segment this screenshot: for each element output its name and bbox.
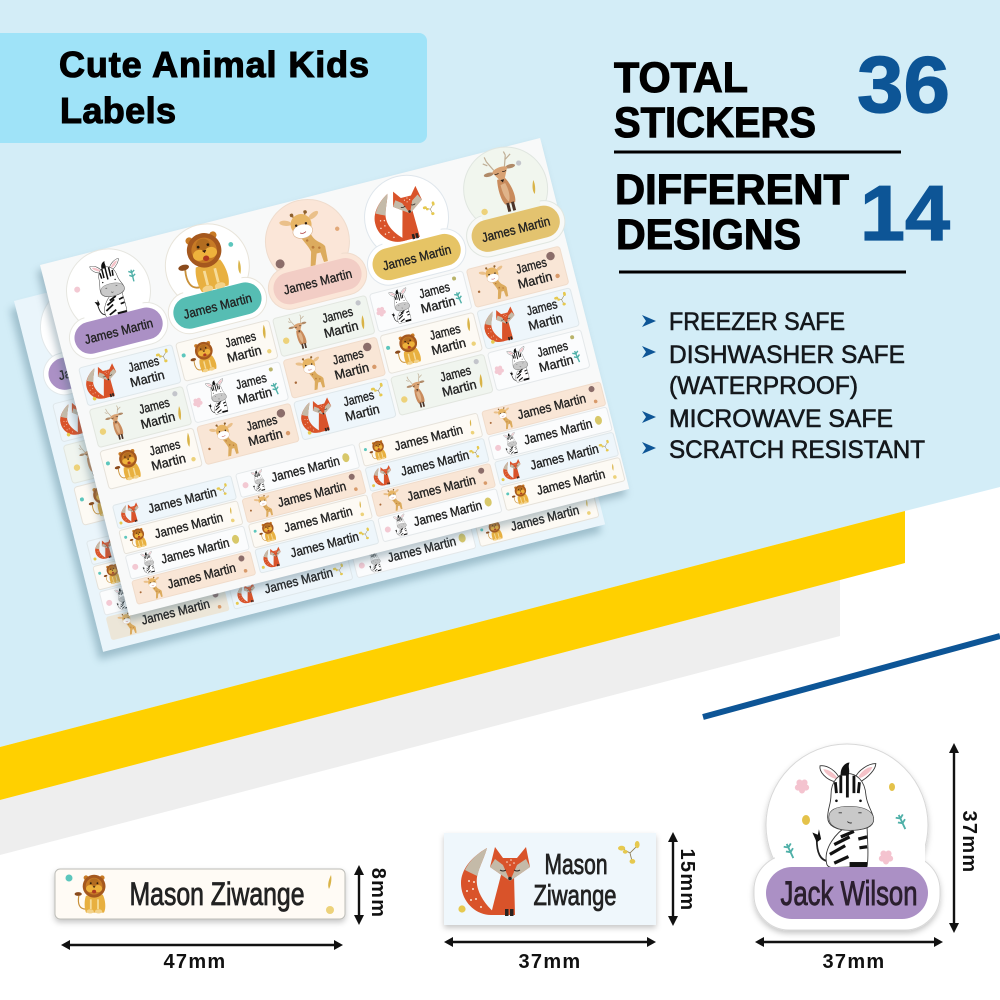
sample label: lion 47x8mm: Mason Ziwange [130, 876, 304, 912]
medium label row 1: lion: Martin [225, 342, 263, 366]
medium label row 3: fox: James [342, 387, 376, 410]
medium label row 1: fox: Martin [128, 367, 166, 390]
front label sheet [37, 136, 633, 622]
back label: lion: Martin [124, 486, 161, 510]
back small label: lion row four: James Martin [509, 503, 581, 534]
medium label row 2: lion: Martin [430, 335, 467, 358]
total stickers stat: TOTAL [614, 54, 748, 102]
small label column D: giraffe: James Martin [516, 391, 588, 422]
medium label row 1: deer: James [320, 304, 355, 326]
feature 4: SCRATCH RESISTANT [669, 436, 925, 464]
medium label row 2: giraffe: Martin [333, 359, 371, 383]
medium label row 3: giraffe: Martin [246, 426, 284, 449]
small label column B: giraffe [242, 469, 366, 523]
medium label row 2: fox: Martin [527, 310, 564, 333]
dimension: 37mm fox: 37mm [518, 951, 582, 973]
small label column B: lion [248, 495, 372, 548]
sample sticker: zebra 37x37mm: Jack Wilson [780, 875, 918, 913]
medium label row 3: fox [294, 379, 396, 440]
medium label row 2: zebra [186, 362, 289, 423]
sticker: fox yellow: James Martin [381, 242, 453, 274]
small label column C: fox [365, 438, 489, 492]
back small label: zebra: James Martin [133, 571, 205, 603]
small label column D: lion [501, 457, 625, 511]
medium label row 2: lion: James [428, 321, 462, 343]
different designs stat: DESIGNS [616, 211, 801, 259]
back label: lion [74, 464, 176, 525]
medium label row 1: fox: James [127, 353, 161, 375]
back small label: giraffe: James Martin [140, 596, 211, 628]
back label: deer [63, 422, 166, 484]
small label column B: lion: James Martin [282, 504, 354, 535]
arrow bullet 4 [642, 442, 656, 454]
medium label row 2: lion [380, 312, 483, 374]
back small label: lion [93, 537, 217, 590]
light blue diagonal background [0, 0, 1000, 747]
medium label row 2: giraffe: James [331, 345, 365, 368]
small label column C: giraffe: James Martin [406, 473, 477, 504]
back label: deer: James [111, 431, 145, 453]
sticker: lion teal: James Martin [182, 291, 254, 322]
grey diagonal band [0, 580, 840, 855]
medium label row 2: zebra: Martin [236, 384, 274, 407]
medium label row 3: lion: Martin [150, 450, 187, 474]
yellow diagonal band [0, 511, 905, 800]
total stickers stat [614, 40, 950, 147]
small label column C: lion [359, 413, 483, 466]
medium label row 3: zebra: James [535, 338, 570, 360]
small label column D: zebra [488, 407, 612, 460]
medium label row 2: deer: James [137, 395, 171, 417]
small label column A: zebra: James Martin [159, 535, 231, 567]
total stickers stat: STICKERS [614, 99, 816, 147]
small label column B: giraffe: James Martin [276, 479, 348, 510]
back label: fox: Martin [102, 403, 140, 426]
back small label: zebra [99, 562, 223, 615]
small label column B: zebra [236, 444, 360, 498]
medium label row 1: lion: James [223, 328, 258, 351]
sticker: zebra purple: James Martin [83, 316, 155, 347]
feature 3: MICROWAVE SAFE [669, 405, 893, 433]
small label column A: fox: James Martin [147, 485, 218, 516]
back label: fox [53, 381, 155, 442]
medium label row 1: giraffe [466, 246, 569, 308]
divider two [619, 270, 906, 274]
small label column C: zebra [378, 489, 502, 542]
medium label row 2: deer [89, 386, 192, 448]
back sticker: zebra: James Martin [57, 352, 129, 383]
dimension: 37mm sticker width: 37mm [822, 951, 886, 973]
feature list [642, 308, 925, 464]
sample label: lion 47x8mm [55, 869, 345, 919]
medium label row 1: giraffe: James [514, 254, 548, 277]
dimension: 8mm: 8mm [367, 868, 389, 918]
medium label row 2: deer: Martin [139, 409, 177, 432]
medium label row 3: lion [100, 428, 202, 489]
medium label row 3: deer [391, 354, 493, 415]
blue diagonal stripe [703, 636, 1000, 717]
small label column A: giraffe: James Martin [166, 560, 237, 592]
medium label row 3: deer: James [438, 362, 473, 385]
feature 2: DISHWASHER SAFE [669, 341, 905, 369]
medium label row 3: zebra: Martin [537, 352, 575, 375]
total stickers stat: 36 [857, 40, 950, 129]
sticker: zebra purple [50, 238, 172, 363]
dimension: 37mm fox [444, 937, 656, 973]
different designs stat: 14 [860, 169, 950, 257]
title banner: Labels [60, 90, 176, 131]
small label column B: fox [255, 520, 379, 573]
medium label row 1: zebra [369, 271, 472, 332]
medium label row 3: giraffe: James [245, 412, 279, 434]
medium label row 3: deer: Martin [440, 376, 478, 400]
medium label row 2: zebra: James [234, 370, 268, 393]
back sticker: zebra [24, 274, 146, 399]
dimension: 47mm [61, 940, 343, 973]
sticker: giraffe pink [249, 188, 371, 314]
dimension: 37mm sticker height [949, 743, 980, 933]
small label column D: giraffe [482, 382, 606, 435]
medium label row 1: zebra: James [417, 279, 452, 302]
dimension: 37mm sticker height: 37mm [958, 810, 980, 874]
medium label row 3: fox: Martin [343, 401, 381, 424]
sticker: fox yellow [348, 164, 470, 290]
back label: lion: James [122, 472, 156, 495]
medium label row 1: deer: Martin [322, 318, 360, 341]
arrow bullet 3 [642, 411, 656, 423]
sticker: deer gold [447, 136, 569, 261]
back label: deer: Martin [113, 445, 151, 468]
title banner: Cute Animal Kids [59, 44, 369, 85]
medium label row 1: lion [176, 320, 278, 381]
sticker: giraffe pink: James Martin [282, 266, 354, 298]
arrow bullet 1 [642, 315, 656, 327]
back small label: fox row four [229, 556, 353, 609]
dimension: 15mm [668, 832, 698, 926]
back small label: fox [86, 512, 211, 565]
different designs stat [615, 166, 950, 259]
back label: fox: James [101, 389, 135, 411]
small label column A: lion [119, 501, 243, 554]
medium label row 2: giraffe [283, 337, 386, 398]
title banner [0, 33, 427, 143]
arrow bullet 2 [642, 346, 656, 358]
back small label: giraffe [106, 587, 230, 640]
back small label: lion row four [475, 493, 599, 547]
back small label: lion: James Martin [127, 546, 199, 577]
back small label: zebra row four [352, 525, 476, 578]
feature 2 continued: (WATERPROOF) [669, 372, 858, 400]
medium label row 3: zebra [487, 329, 590, 391]
back small label: zebra row four: James Martin [386, 534, 458, 565]
small label column D: lion: James Martin [535, 467, 607, 498]
back small label: fox row four: James Martin [263, 565, 335, 597]
small label column C: zebra: James Martin [412, 498, 484, 529]
small label column A: zebra [125, 526, 249, 579]
medium label row 2: fox [477, 288, 580, 349]
sample label: fox 37x15mm [444, 833, 656, 925]
medium label row 1: giraffe: Martin [516, 268, 554, 292]
sticker: lion teal [149, 213, 271, 338]
medium label row 1: zebra: Martin [419, 293, 457, 316]
small label column A: giraffe [132, 551, 256, 604]
dimension: 47mm: 47mm [163, 951, 227, 973]
small label column D: fox: James Martin [529, 441, 600, 473]
small label column D: zebra: James Martin [522, 416, 594, 448]
sample sticker: zebra 37x37mm [754, 744, 940, 930]
small label column A: lion: James Martin [153, 510, 225, 541]
dimension: 15mm: 15mm [676, 848, 698, 912]
small label column A: fox [112, 476, 237, 529]
back small label: fox: James Martin [121, 521, 192, 552]
dimension: 37mm sticker width [755, 937, 943, 973]
dimension: 8mm [354, 865, 389, 925]
sample label: fox 37x15mm: Ziwange [534, 880, 616, 912]
medium label row 2: fox: James [525, 296, 559, 319]
medium label row 3: lion: James [148, 436, 182, 459]
medium label row 1: deer [272, 295, 375, 357]
sample label: fox 37x15mm: Mason [544, 849, 608, 881]
medium label row 1: fox [79, 345, 181, 406]
back label sheet [10, 173, 605, 660]
small label column D: fox [495, 432, 619, 485]
small label column B: zebra: James Martin [270, 453, 341, 485]
small label column C: lion: James Martin [393, 422, 464, 454]
different designs stat: DIFFERENT [615, 166, 849, 214]
small label column C: fox: James Martin [399, 447, 471, 479]
medium label row 3: giraffe [197, 403, 299, 465]
small label column B: fox: James Martin [289, 529, 361, 561]
small label column C: giraffe [371, 463, 496, 517]
sticker: deer gold: James Martin [480, 214, 552, 245]
divider one [614, 150, 901, 154]
feature 1: FREEZER SAFE [669, 308, 845, 336]
